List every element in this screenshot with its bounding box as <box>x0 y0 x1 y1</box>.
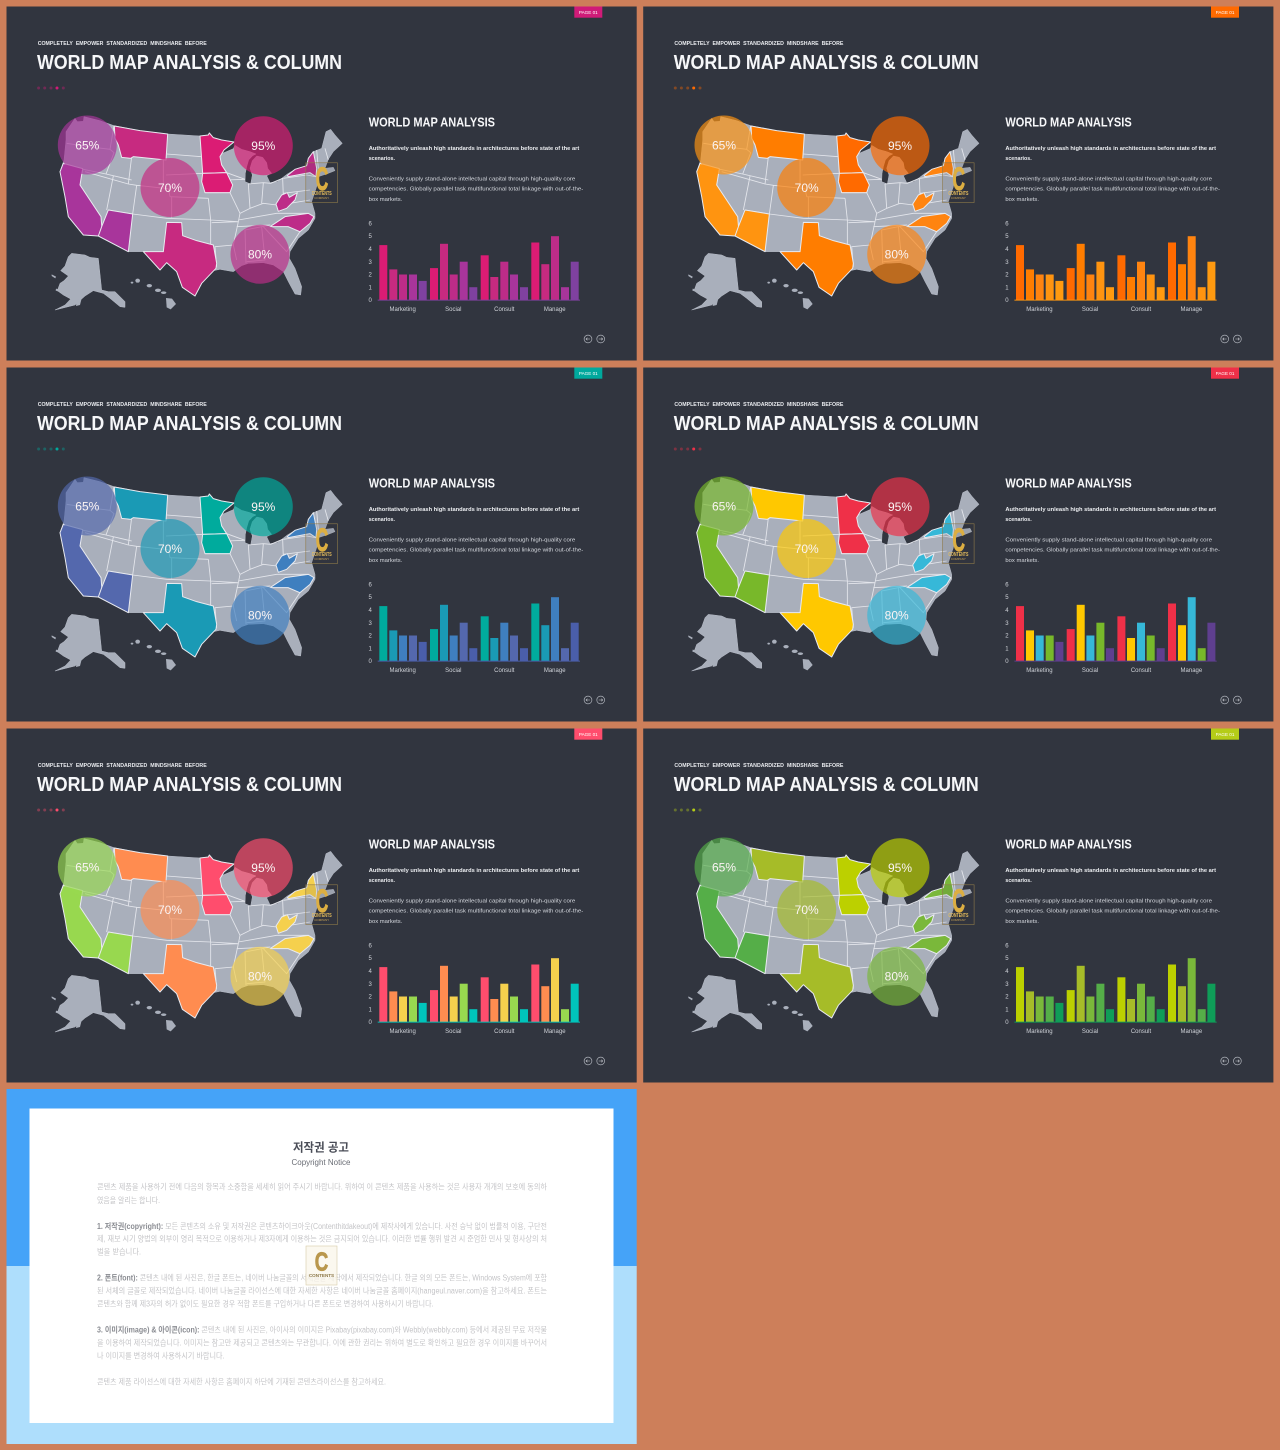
right heading: WORLD MAP ANALYSIS <box>369 477 495 491</box>
column chart: Manage <box>544 668 566 674</box>
column chart: 3 <box>368 982 372 988</box>
column chart: Social <box>1082 1029 1098 1035</box>
panel: slide 6 green <box>643 728 1273 1082</box>
logo watermark: CONTENTS <box>312 191 332 197</box>
column chart: 5 <box>368 234 372 240</box>
body text: box markets. <box>1005 919 1039 925</box>
notice closing line: 콘텐츠 제품 라이선스에 대한 자세한 사항은 홈페이지 하단에 기재된 콘텐츠라이선스를 참고하세요. <box>97 1376 386 1386</box>
eyebrow text: COMPLETELY EMPOWER STANDARDIZED MINDSHARE BEFORE <box>674 763 844 769</box>
logo watermark <box>306 522 337 564</box>
column chart: 2 <box>368 634 372 640</box>
notice clause 1 copyright: 제, 재보 시기 양법의 외부이 영리 목적으로 이용하거나 제3자에게 이용하는 것은 금지되어 있습니다. 이러한 법률 행위 발견 시 준엄한 민사 및 형사상의 처 <box>97 1234 547 1244</box>
logo watermark: C <box>952 522 965 558</box>
notice intro <box>97 1182 548 1205</box>
pagination dots <box>37 86 65 90</box>
column chart: Manage <box>544 307 566 313</box>
body text <box>369 176 583 203</box>
nav arrows <box>584 696 605 704</box>
column chart: Marketing <box>390 668 416 674</box>
lead text: Authoritatively unleash high standards in architectures before state of the art <box>1005 507 1216 513</box>
circle callouts: 70% <box>795 903 819 917</box>
column chart: Consult <box>494 668 515 674</box>
notice clause 3 image and icon: 나 이미지를 변경하여 사용하시기 바랍니다. <box>97 1350 224 1360</box>
column chart: 1 <box>1005 646 1009 652</box>
panel: slide 4 multicolor <box>643 368 1273 722</box>
nav arrows <box>1221 1057 1241 1065</box>
right heading: WORLD MAP ANALYSIS <box>1005 116 1132 130</box>
column chart: 4 <box>368 969 372 975</box>
logo watermark: COMPANY <box>314 557 329 561</box>
column chart: Consult <box>1131 668 1152 674</box>
pagination dots <box>674 86 702 90</box>
notice clause 2 font: 콘텐츠와 함께 제3자의 허가 없이도 필요한 경우 적합 폰트를 구입하거나 다른 폰트로 변경하여 사용하시기 바랍니다. <box>97 1298 434 1308</box>
logo watermark <box>942 161 974 203</box>
nav arrows <box>584 335 605 343</box>
column chart: 1 <box>1005 1007 1009 1013</box>
body text: competencies. Globally parallel task multifunctional total linkage with out-of-the- <box>1005 186 1220 192</box>
page tag <box>574 728 602 740</box>
US map <box>688 478 979 671</box>
body text: Conveniently supply stand-alone intellectual capital through high-quality core <box>369 898 575 904</box>
notice intro: 였음을 알리는 합니다. <box>97 1195 160 1205</box>
lead text <box>1005 507 1216 523</box>
column chart <box>1005 582 1217 674</box>
page tag <box>1211 368 1239 379</box>
lead text: Authoritatively unleash high standards in architectures before state of the art <box>1005 146 1216 152</box>
page tag <box>1211 6 1239 18</box>
circle callouts: 70% <box>158 542 182 556</box>
column chart: Social <box>445 1029 461 1035</box>
column chart: Consult <box>1131 307 1152 313</box>
logo watermark <box>306 883 337 925</box>
notice clause 3 image and icon: 3. 이미지(image) & 아이콘(icon): 콘텐츠 내에 된 사진은, 아이사의 이미지은 Pixabay(pixabay.com)와 Webbly(webbly.com) 등에서 제공된 무료 저작물 <box>97 1324 547 1334</box>
column chart: 4 <box>1005 608 1009 614</box>
title: WORLD MAP ANALYSIS & COLUMN <box>674 413 979 435</box>
notice heading: 저작권 공고 <box>293 1140 349 1154</box>
column chart: 6 <box>368 582 372 588</box>
nav arrows <box>1221 335 1241 343</box>
US map <box>52 117 342 310</box>
notice clause 2 font: 된 서체의 글꼴로 제작되었습니다. 네이버 나눔글꼴 라이선스에 대한 자세한 사항은 네이버 나눔글꼴 홈페이지(hangeul.naver.com)을 참고하세요. 폰트는 <box>97 1286 547 1296</box>
notice subheading: Copyright Notice <box>292 1157 351 1167</box>
logo watermark <box>942 883 974 925</box>
column chart: 5 <box>368 956 372 962</box>
column chart <box>368 222 580 313</box>
body text <box>369 537 583 564</box>
column chart: Marketing <box>390 307 416 313</box>
panel: slide 5 pastel <box>6 728 637 1082</box>
eyebrow text: COMPLETELY EMPOWER STANDARDIZED MINDSHARE BEFORE <box>674 41 844 47</box>
column chart: Consult <box>494 307 515 313</box>
column chart: Social <box>445 668 461 674</box>
column chart: Social <box>1082 668 1098 674</box>
notice clause 1 copyright <box>97 1221 547 1257</box>
column chart: 0 <box>1005 1020 1009 1026</box>
circle callouts: 95% <box>888 500 912 514</box>
page tag: PAGE 01 <box>579 732 598 737</box>
body text: competencies. Globally parallel task multifunctional total linkage with out-of-the- <box>369 547 583 553</box>
column chart: 3 <box>1005 982 1009 988</box>
page tag: PAGE 01 <box>579 10 598 15</box>
logo watermark: COMPANY <box>951 196 966 200</box>
right heading: WORLD MAP ANALYSIS <box>369 838 495 852</box>
pagination dots <box>37 808 65 812</box>
circle callouts: 95% <box>888 139 912 153</box>
title: WORLD MAP ANALYSIS & COLUMN <box>674 774 979 796</box>
panel: copyright notice <box>6 1089 637 1444</box>
column chart: 3 <box>368 260 372 266</box>
logo watermark: CONTENTS <box>312 552 332 558</box>
logo watermark: COMPANY <box>314 918 329 922</box>
lead text: scenarios. <box>1005 156 1032 162</box>
notice clause 2 font: 2. 폰트(font): 콘텐츠 내에 된 사진은, 한글 폰트는, 네이버 나눔글꼴의 서체들을 재작에서 제작되었습니다. 한글 외의 모든 폰트는, Windows System에 포함 <box>97 1273 548 1283</box>
page tag <box>1211 728 1239 740</box>
logo watermark <box>942 522 974 564</box>
column chart: 0 <box>1005 659 1009 665</box>
nav arrows <box>1221 696 1241 704</box>
column chart: 5 <box>1005 234 1009 240</box>
body text: Conveniently supply stand-alone intellectual capital through high-quality core <box>1005 898 1212 904</box>
circle callouts <box>58 476 293 645</box>
body text: box markets. <box>369 919 403 925</box>
panel: slide 2 orange <box>643 6 1273 360</box>
circle callouts: 65% <box>712 138 736 152</box>
pagination dots <box>674 448 702 450</box>
pagination dots <box>674 808 702 812</box>
title: WORLD MAP ANALYSIS & COLUMN <box>37 52 342 74</box>
title: WORLD MAP ANALYSIS & COLUMN <box>37 413 342 435</box>
column chart: Marketing <box>1026 1029 1053 1035</box>
column chart: 5 <box>1005 595 1009 601</box>
column chart: 1 <box>368 285 372 291</box>
page tag: PAGE 01 <box>1216 10 1235 15</box>
circle callouts <box>694 116 930 284</box>
notice clause 3 image and icon: 을 이용하여 제작되었습니다. 이미지는 참고만 제공되고 콘텐츠와는 무관합니다. 이에 관한 권리는 위하여 별도로 확인하고 필요한 경우 이미지를 바꾸어서 <box>97 1337 547 1347</box>
column chart: 2 <box>368 995 372 1001</box>
circle callouts <box>694 838 930 1006</box>
column chart: Social <box>1082 307 1098 313</box>
panel: slide 3 teal <box>6 368 637 722</box>
right heading: WORLD MAP ANALYSIS <box>369 116 495 130</box>
column chart: 0 <box>368 1020 372 1026</box>
circle callouts: 70% <box>795 542 819 556</box>
body text <box>1005 537 1220 564</box>
column chart: Manage <box>1181 307 1203 313</box>
lead text: scenarios. <box>369 878 395 884</box>
logo watermark: COMPANY <box>951 918 966 922</box>
column chart: Marketing <box>1026 307 1053 313</box>
circle callouts <box>58 838 293 1006</box>
circle callouts: 65% <box>712 499 736 513</box>
eyebrow text: COMPLETELY EMPOWER STANDARDIZED MINDSHARE BEFORE <box>674 402 844 408</box>
column chart <box>368 944 580 1035</box>
notice clause 3 image and icon <box>97 1324 547 1360</box>
body text: Conveniently supply stand-alone intellectual capital through high-quality core <box>1005 176 1212 182</box>
column chart: 2 <box>1005 995 1009 1001</box>
circle callouts: 70% <box>158 903 182 917</box>
column chart <box>1005 222 1217 313</box>
body text <box>1005 176 1220 203</box>
column chart: Manage <box>1181 668 1203 674</box>
circle callouts: 80% <box>885 248 909 262</box>
page tag: PAGE 01 <box>1216 371 1235 376</box>
nav arrows <box>584 1057 605 1065</box>
page tag: PAGE 01 <box>579 371 598 376</box>
circle callouts: 95% <box>888 861 912 875</box>
lead text: scenarios. <box>1005 878 1032 884</box>
circle callouts: 65% <box>75 860 100 874</box>
US map <box>52 478 342 671</box>
column chart: 1 <box>1005 285 1009 291</box>
logo watermark center: C <box>315 1246 328 1276</box>
column chart: 2 <box>1005 634 1009 640</box>
logo watermark center <box>306 1246 337 1285</box>
lead text <box>369 146 579 162</box>
circle callouts: 80% <box>885 609 909 623</box>
lead text: Authoritatively unleash high standards in architectures before state of the art <box>1005 868 1216 874</box>
body text: competencies. Globally parallel task multifunctional total linkage with out-of-the- <box>1005 908 1220 914</box>
circle callouts: 95% <box>251 139 276 153</box>
column chart: 3 <box>1005 260 1009 266</box>
logo watermark: C <box>316 522 328 558</box>
circle callouts: 65% <box>75 138 100 152</box>
body text: Conveniently supply stand-alone intellectual capital through high-quality core <box>369 537 575 543</box>
page tag: PAGE 01 <box>1216 732 1235 737</box>
circle callouts: 95% <box>251 500 276 514</box>
column chart: 4 <box>368 247 372 253</box>
page tag <box>574 6 602 18</box>
circle callouts <box>58 116 293 284</box>
title: WORLD MAP ANALYSIS & COLUMN <box>674 52 979 74</box>
lead text <box>1005 146 1216 162</box>
body text <box>1005 898 1220 925</box>
column chart: 6 <box>1005 944 1009 950</box>
title: WORLD MAP ANALYSIS & COLUMN <box>37 774 342 796</box>
notice clause 1 copyright: 벌을 받습니다. <box>97 1247 141 1257</box>
logo watermark center: CONTENTS <box>309 1273 334 1278</box>
body text: competencies. Globally parallel task multifunctional total linkage with out-of-the- <box>369 908 583 914</box>
circle callouts: 95% <box>251 861 276 875</box>
logo watermark: CONTENTS <box>948 913 969 919</box>
column chart: 5 <box>1005 956 1009 962</box>
column chart: Social <box>445 307 461 313</box>
body text: competencies. Globally parallel task multifunctional total linkage with out-of-the- <box>369 186 583 192</box>
circle callouts: 65% <box>712 860 736 874</box>
US map <box>52 839 342 1032</box>
column chart: 5 <box>368 595 372 601</box>
logo watermark: CONTENTS <box>312 913 332 919</box>
logo watermark: CONTENTS <box>948 552 969 558</box>
column chart: 0 <box>1005 298 1009 304</box>
notice intro: 콘텐츠 제품을 사용하기 전에 다음의 항목과 소중함을 세세히 읽어 주시기 바랍니다. 위하여 이 콘텐츠 제품을 사용하는 것은 사용자 개개의 보호에 동의하 <box>97 1182 548 1192</box>
column chart: 2 <box>1005 273 1009 279</box>
circle callouts: 65% <box>75 499 100 513</box>
column chart <box>368 582 580 674</box>
column chart: Manage <box>1181 1029 1203 1035</box>
circle callouts: 80% <box>248 248 272 262</box>
column chart: 6 <box>1005 222 1009 228</box>
column chart: 4 <box>368 608 372 614</box>
body text: Conveniently supply stand-alone intellectual capital through high-quality core <box>1005 537 1212 543</box>
body text: box markets. <box>369 197 403 203</box>
body text: Conveniently supply stand-alone intellectual capital through high-quality core <box>369 176 575 182</box>
column chart: Consult <box>1131 1029 1152 1035</box>
body text <box>369 898 583 925</box>
circle callouts: 70% <box>158 181 182 195</box>
notice clause 1 copyright: 1. 저작권(copyright): 모든 콘텐츠의 소유 및 저작권은 콘텐츠하이크아웃(Contenthitdakeout)에 제작사에게 있습니다. 사전 승낙 없이 법률적 이용, 구단전 <box>97 1221 547 1231</box>
column chart: Marketing <box>390 1029 416 1035</box>
column chart: 6 <box>368 222 372 228</box>
column chart: 1 <box>368 1007 372 1013</box>
circle callouts: 70% <box>795 181 819 195</box>
lead text: scenarios. <box>1005 517 1032 523</box>
circle callouts <box>694 476 930 645</box>
eyebrow text: COMPLETELY EMPOWER STANDARDIZED MINDSHARE BEFORE <box>38 763 207 769</box>
notice clause 2 font <box>97 1273 548 1308</box>
column chart: 3 <box>368 621 372 627</box>
pagination dots <box>37 448 65 450</box>
circle callouts: 80% <box>885 970 909 984</box>
body text: box markets. <box>369 558 403 564</box>
lead text: Authoritatively unleash high standards in architectures before state of the art <box>369 868 579 874</box>
page tag <box>574 368 602 379</box>
circle callouts: 80% <box>248 970 272 984</box>
right heading: WORLD MAP ANALYSIS <box>1005 838 1132 852</box>
column chart: 2 <box>368 273 372 279</box>
lead text: Authoritatively unleash high standards in architectures before state of the art <box>369 146 579 152</box>
eyebrow text: COMPLETELY EMPOWER STANDARDIZED MINDSHARE BEFORE <box>38 41 207 47</box>
column chart: Manage <box>544 1029 566 1035</box>
logo watermark: C <box>952 161 965 197</box>
logo watermark: CONTENTS <box>948 191 969 197</box>
logo watermark: COMPANY <box>314 196 329 200</box>
column chart: Consult <box>494 1029 515 1035</box>
column chart <box>1005 944 1217 1035</box>
column chart: 3 <box>1005 621 1009 627</box>
US map <box>688 839 979 1032</box>
lead text: Authoritatively unleash high standards in architectures before state of the art <box>369 507 579 513</box>
column chart: 6 <box>368 944 372 950</box>
lead text <box>1005 868 1216 884</box>
logo watermark: C <box>316 161 328 197</box>
lead text: scenarios. <box>369 517 395 523</box>
right heading: WORLD MAP ANALYSIS <box>1005 477 1132 491</box>
logo watermark: C <box>952 883 965 919</box>
column chart: 4 <box>1005 247 1009 253</box>
logo watermark <box>306 161 337 203</box>
eyebrow text: COMPLETELY EMPOWER STANDARDIZED MINDSHARE BEFORE <box>38 402 207 408</box>
column chart: 0 <box>368 298 372 304</box>
logo watermark: COMPANY <box>951 557 966 561</box>
body text: box markets. <box>1005 558 1039 564</box>
body text: box markets. <box>1005 197 1039 203</box>
panel: slide 1 magenta <box>6 6 637 360</box>
body text: competencies. Globally parallel task multifunctional total linkage with out-of-the- <box>1005 547 1220 553</box>
column chart: 1 <box>368 646 372 652</box>
column chart: 0 <box>368 659 372 665</box>
lead text <box>369 507 579 523</box>
circle callouts: 80% <box>248 609 272 623</box>
lead text <box>369 868 579 884</box>
lead text: scenarios. <box>369 156 395 162</box>
column chart: 4 <box>1005 969 1009 975</box>
column chart: Marketing <box>1026 668 1053 674</box>
column chart: 6 <box>1005 582 1009 588</box>
US map <box>688 117 979 310</box>
logo watermark: C <box>316 883 328 919</box>
